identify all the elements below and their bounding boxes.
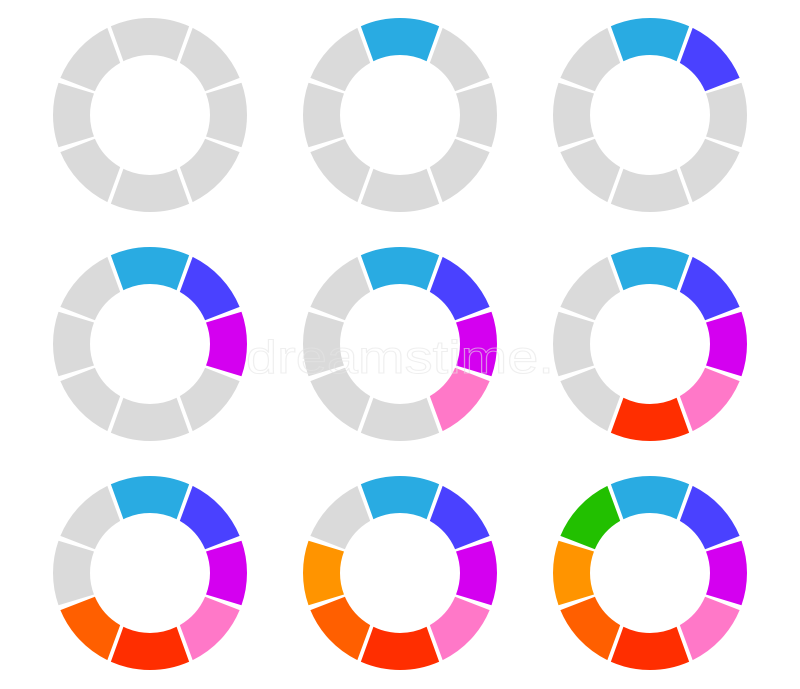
segment: pink [180,597,240,660]
segment: indigo [180,257,240,320]
segment: indigo [430,257,490,320]
donut 4: three segments filled [53,247,247,441]
segment: blue [611,18,689,61]
donut 2: one segment filled [303,18,497,212]
segment: green [560,486,620,549]
donut 7: six segments filled [53,476,247,670]
segment: pink [430,597,490,660]
segment: dark orange [60,597,120,660]
segment: pink [680,368,740,431]
segment: indigo [430,486,490,549]
segment: dark orange [310,597,370,660]
segment: orange [553,541,594,605]
segment: blue [611,247,689,290]
donut 8: seven segments filled [303,476,497,670]
donut 5: four segments filled [303,247,497,441]
segment: indigo [680,486,740,549]
segment: orange [303,541,344,605]
donut 3: two segments filled [553,18,747,212]
segment: magenta [456,541,497,605]
segment: magenta [706,541,747,605]
segment: indigo [680,257,740,320]
segment: magenta [706,312,747,376]
segment: indigo [180,486,240,549]
segment: indigo [680,28,740,91]
segment: magenta [206,541,247,605]
donut 1: no segments filled [53,18,247,212]
segment: blue [361,476,439,519]
segment: pink [680,597,740,660]
watermark text: dreamstime. [246,331,554,383]
segment: red [361,627,439,670]
segment: blue [611,476,689,519]
segment: blue [111,247,189,290]
donut 9: all eight segments filled [553,476,747,670]
donut 6: five segments filled [553,247,747,441]
segment: red [611,398,689,441]
segment: red [611,627,689,670]
segment: blue [111,476,189,519]
segment: blue [361,18,439,61]
segment: blue [361,247,439,290]
segment: dark orange [560,597,620,660]
segment: magenta [456,312,497,376]
segment: pink [430,368,490,431]
segment: red [111,627,189,670]
segment: magenta [206,312,247,376]
